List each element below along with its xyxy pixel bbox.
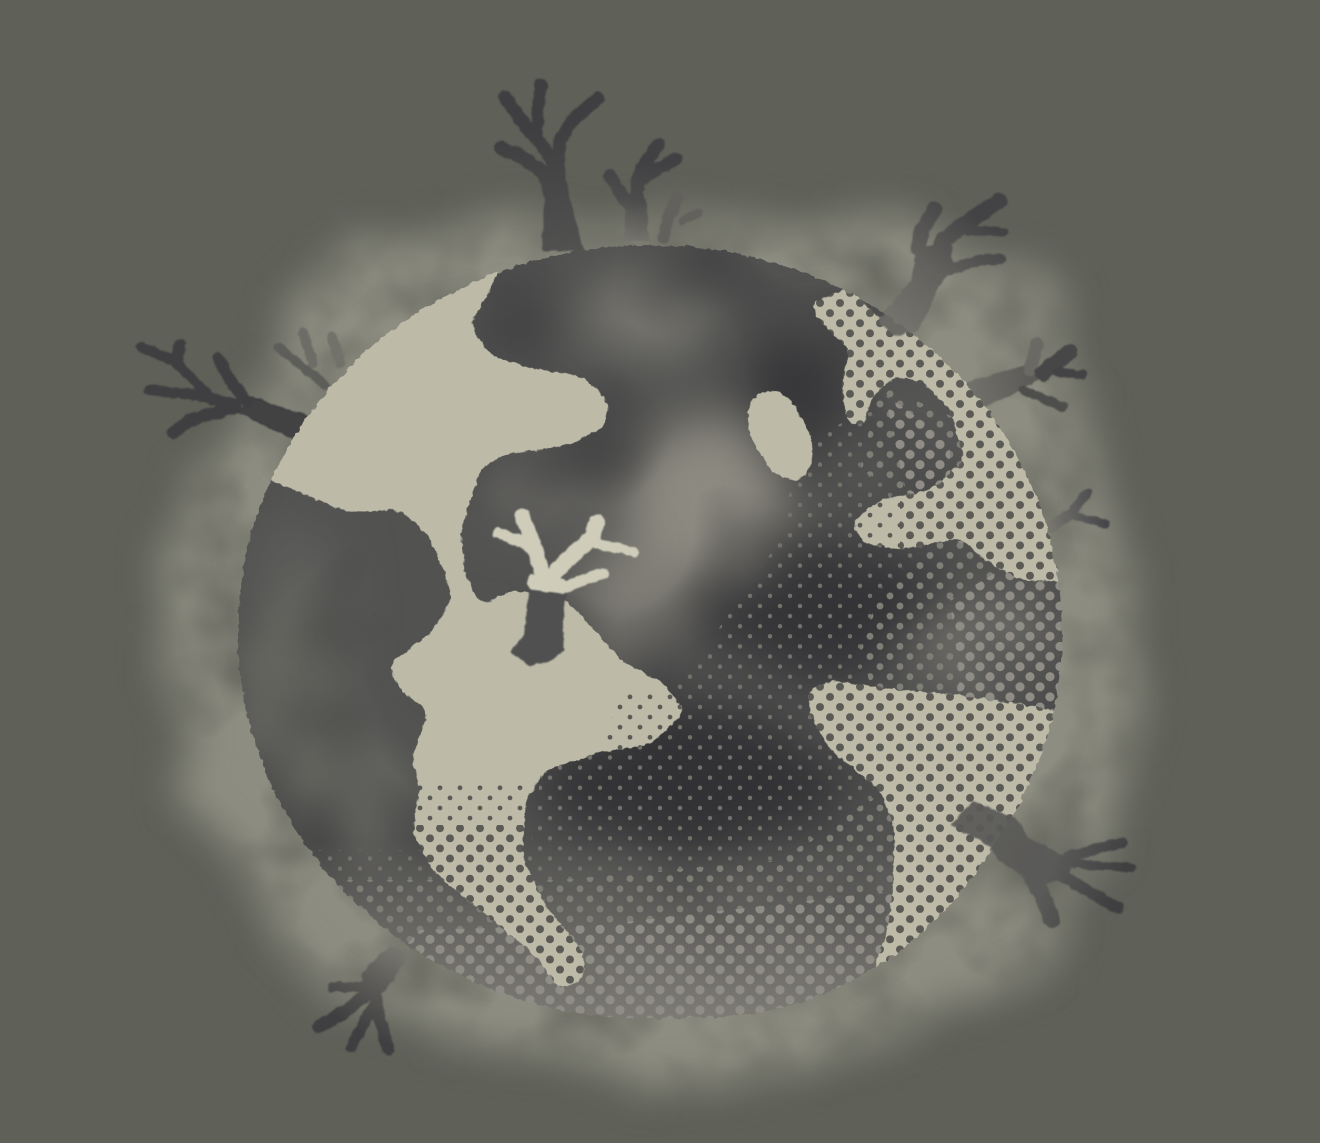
centre tree trunk [512, 590, 565, 665]
ocean watercolor [230, 240, 1080, 1030]
land fill [271, 272, 1058, 986]
smoky haze around the globe [160, 210, 1135, 1090]
tree: lower right [952, 802, 1132, 920]
tree: upper right [878, 201, 1004, 336]
halftone on ocean [318, 390, 1062, 1019]
tree: left faint [278, 333, 340, 385]
globe [230, 240, 1080, 1030]
tree: bottom left [319, 947, 410, 1049]
halftone on land [400, 280, 1070, 1000]
tree: top centre small [610, 145, 676, 240]
land masses [271, 272, 1058, 987]
tree: right [960, 344, 1082, 407]
trees behind the globe [141, 84, 1106, 1049]
centre tree branches [498, 516, 634, 588]
tree trunk overlapping right land [880, 314, 908, 337]
tree: top centre faint [664, 199, 699, 238]
tree: left large [141, 345, 328, 448]
tree: right small [1050, 492, 1106, 527]
tree: top centre tall [501, 84, 598, 250]
tree: centre on globe [498, 516, 634, 665]
illustration: globe with bare trees [135, 78, 1158, 1106]
